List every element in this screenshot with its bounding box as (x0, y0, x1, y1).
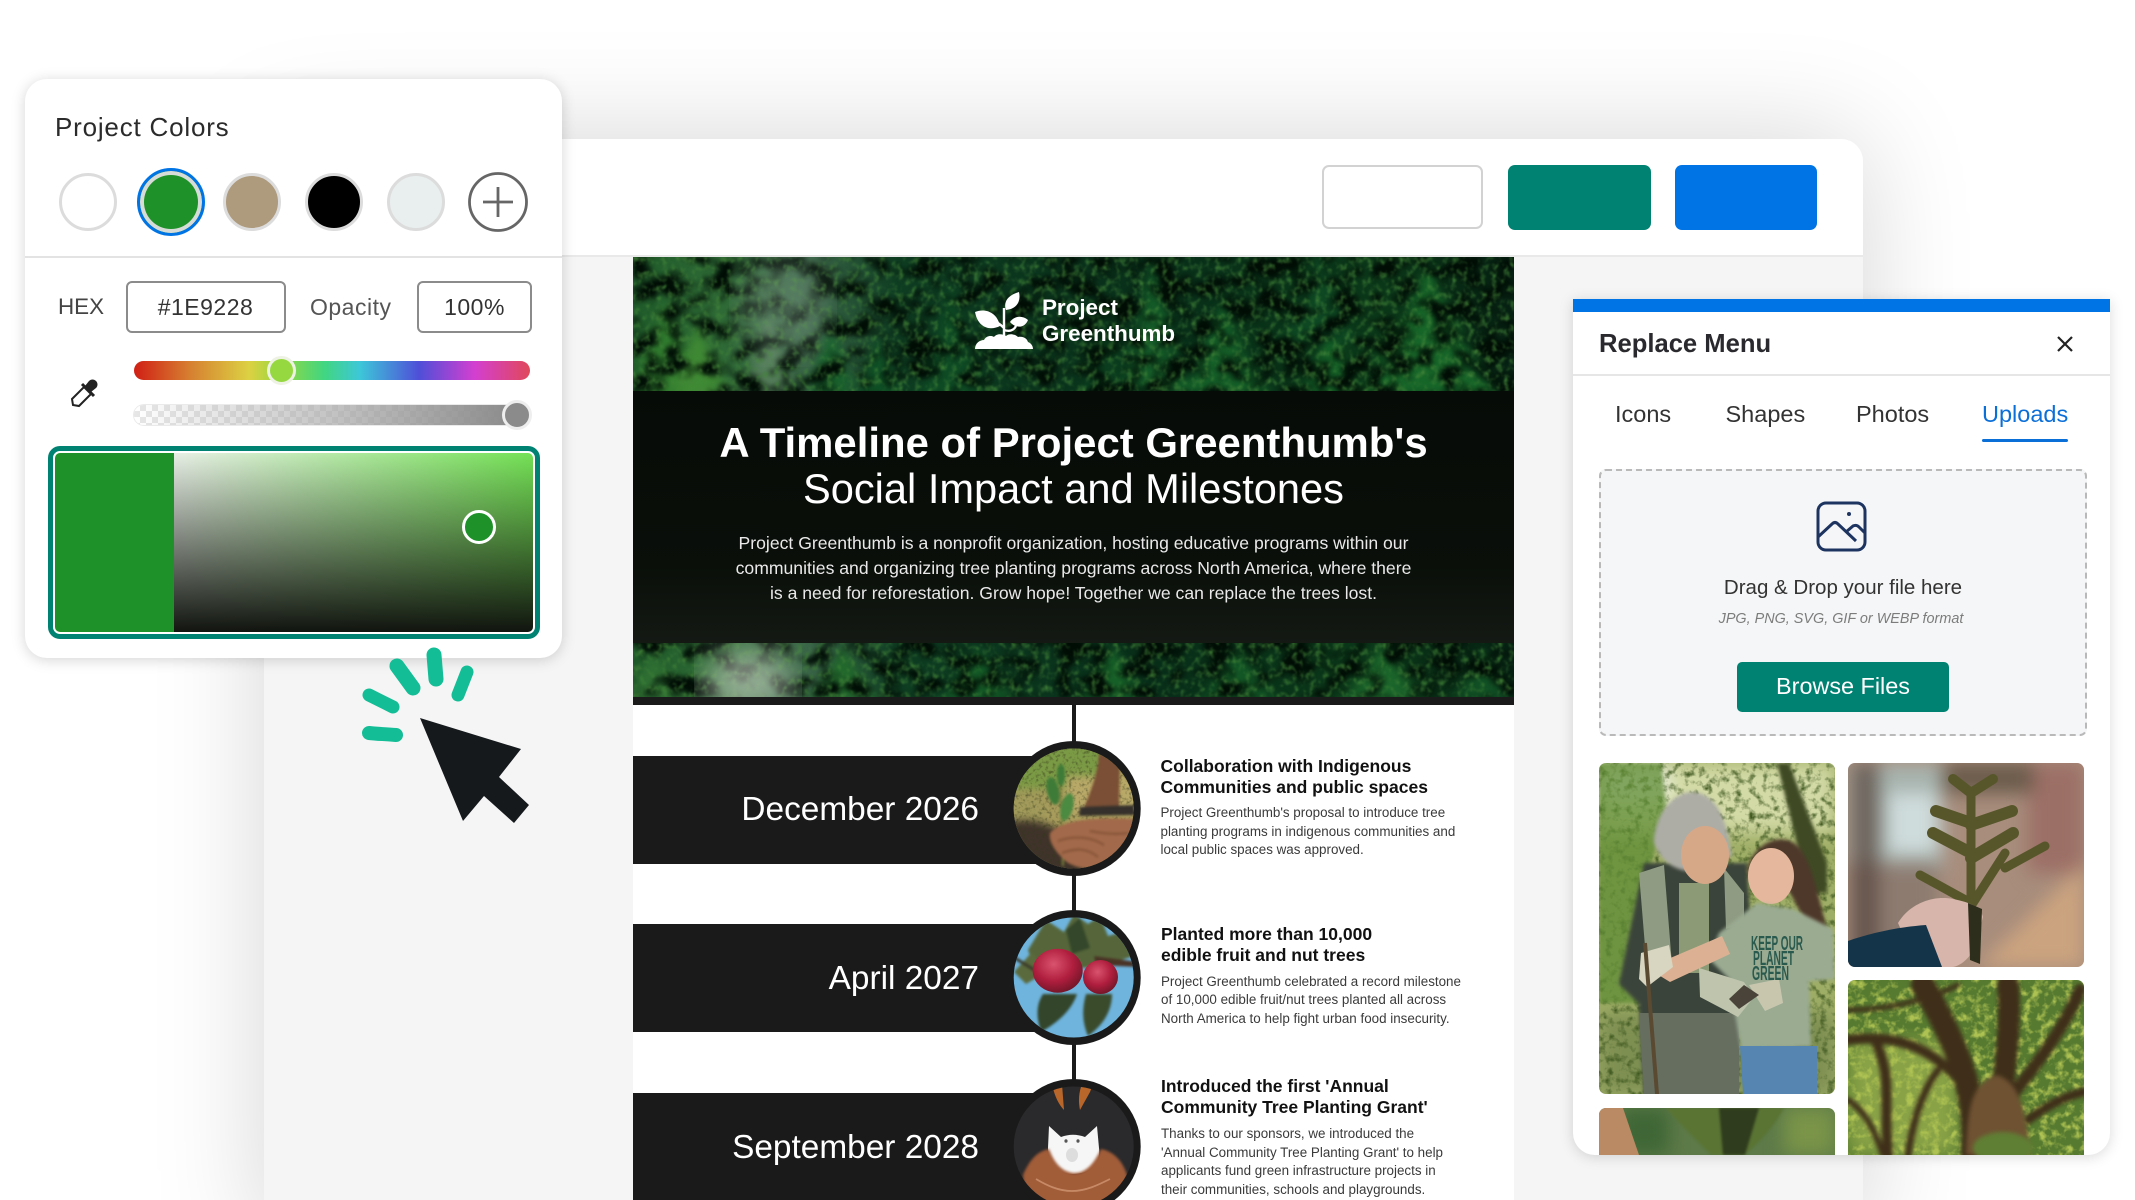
divider (25, 256, 562, 258)
milestone: April 2027 (633, 910, 1461, 1045)
tab underline (1982, 439, 2068, 442)
logo wordmark (1042, 294, 1175, 346)
click sparks (362, 648, 474, 742)
milestone heading: Introduced the first 'Annual (1161, 1076, 1389, 1096)
saturation gradient (174, 452, 532, 632)
milestone: December 2026 (633, 741, 1455, 876)
hue thumb (267, 356, 296, 385)
intro paragraph: is a need for reforestation. Grow hope! Together we can replace the trees lost. (770, 583, 1377, 603)
milestone description: of 10,000 edible fruit/nut trees planted all across (1161, 992, 1446, 1007)
milestone heading (1161, 1076, 1428, 1117)
swatch: tan (223, 173, 281, 231)
panel: replace menu (1573, 299, 2110, 1155)
date band (633, 1093, 1073, 1200)
timeline section background (633, 697, 1514, 1200)
timeline spine (1072, 705, 1076, 1145)
toolbar button: teal (1508, 165, 1651, 230)
photo: large tree canopy (1848, 980, 2084, 1155)
hex input (126, 281, 286, 333)
colour picker field (48, 446, 540, 638)
milestone text (1161, 1076, 1443, 1197)
milestone description (1161, 974, 1461, 1026)
photo: grandmother and girl planting (1599, 763, 1835, 1094)
tab: shapes: Shapes (1726, 401, 1805, 427)
photo: person with shrub (cropped) (1599, 1108, 1835, 1155)
opacity input: 100% (444, 294, 505, 320)
upload drop zone (1599, 469, 2087, 736)
photo: grandmother and girl planting: PLANET (1753, 948, 1794, 970)
heading: Social Impact and Milestones (803, 465, 1344, 512)
tab: photos: Photos (1856, 401, 1929, 427)
milestone description: planting programs in indigenous communities and (1160, 824, 1455, 839)
cursor arrow (420, 718, 529, 823)
hex input: #1E9228 (158, 294, 253, 320)
main editor card (264, 139, 1863, 1200)
opacity thumb (502, 400, 532, 430)
toolbar button: outline (1322, 165, 1483, 229)
swatch: black (305, 173, 363, 231)
panel title: Project Colors (55, 112, 229, 142)
hue slider (134, 361, 530, 380)
date band (633, 924, 1073, 1032)
heading: A Timeline of Project Greenthumb's (719, 419, 1428, 466)
heading (719, 419, 1428, 512)
milestone description: Project Greenthumb's proposal to introduce tree (1160, 805, 1445, 820)
milestone heading: edible fruit and nut trees (1161, 945, 1365, 965)
tab: icons: Icons (1615, 401, 1671, 427)
header rule (633, 697, 1514, 705)
tab: uploads active: Uploads (1982, 401, 2068, 427)
date label: September 2028 (732, 1129, 979, 1166)
swatch: white (59, 173, 117, 231)
add swatch button (468, 172, 528, 232)
photo: piggy bank in hands (1014, 1079, 1141, 1200)
photo: planting seedling (1014, 741, 1141, 876)
milestone description: 'Annual Community Tree Planting Grant' to help (1161, 1145, 1443, 1160)
drop instruction: Drag & Drop your file here (1724, 576, 1962, 599)
opacity slider (134, 405, 530, 425)
icon: eyedropper (70, 380, 98, 408)
picker thumb (462, 510, 496, 544)
milestone description (1161, 1126, 1443, 1197)
file format hint: JPG, PNG, SVG, GIF or WEBP format (1719, 611, 1963, 627)
intro paragraph: communities and organizing tree planting programs across North America, where there (736, 558, 1411, 578)
date label: December 2026 (741, 791, 979, 828)
milestone text (1160, 756, 1455, 857)
logo wordmark: Greenthumb (1042, 320, 1175, 346)
swatch: light grey (387, 173, 445, 231)
intro paragraph (736, 533, 1411, 603)
browse button: Browse Files (1776, 673, 1910, 699)
infographic header: forest photo (633, 257, 1514, 1146)
panel title: Replace Menu (1599, 330, 1771, 358)
milestone description: North America to help fight urban food insecurity. (1161, 1011, 1450, 1026)
milestone description: applicants fund green infrastructure projects in (1161, 1163, 1436, 1178)
divider (1573, 374, 2110, 376)
hex label: HEX (58, 294, 104, 319)
milestone heading: Planted more than 10,000 (1161, 924, 1372, 944)
milestone description (1160, 805, 1455, 857)
logo: Project Greenthumb (975, 292, 1175, 349)
milestone description: Project Greenthumb celebrated a record milestone (1161, 974, 1461, 988)
tab divider (1573, 441, 2110, 443)
swatch: selected green (137, 168, 205, 236)
milestone description: Thanks to our sponsors, we introduced the (1161, 1126, 1414, 1141)
milestone heading (1160, 756, 1428, 797)
toolbar button: blue (1675, 165, 1817, 230)
milestone heading: Community Tree Planting Grant' (1161, 1097, 1428, 1117)
date label: April 2027 (829, 960, 979, 996)
milestone heading: Collaboration with Indigenous (1160, 756, 1411, 776)
milestone: September 2028 (633, 1076, 1443, 1200)
dark title panel (633, 391, 1514, 643)
current colour block (54, 452, 174, 632)
photo: grandmother and girl planting: GREEN (1752, 963, 1789, 985)
icon: image (1816, 502, 1866, 552)
tabs (1615, 401, 2068, 442)
opacity input (417, 281, 532, 333)
browse button (1737, 662, 1949, 712)
logo wordmark: Project (1042, 294, 1118, 320)
date band (633, 756, 1073, 864)
milestone text (1161, 924, 1461, 1026)
photo: apples on branch (1014, 910, 1141, 1045)
panel: project colors (25, 79, 562, 658)
milestone heading: Communities and public spaces (1160, 777, 1428, 797)
intro paragraph: Project Greenthumb is a nonprofit organization, hosting educative programs within our (739, 533, 1408, 553)
opacity label: Opacity (310, 294, 391, 320)
panel accent bar (1573, 299, 2110, 312)
milestone heading (1161, 924, 1372, 965)
icon: sprout logo (975, 292, 1033, 349)
icon: close (2057, 336, 2073, 352)
milestone description: their communities, schools and playgrounds. (1161, 1182, 1425, 1197)
milestone description: local public spaces was approved. (1160, 842, 1364, 857)
photo: hand holding spruce sprig (1848, 763, 2084, 967)
top toolbar (264, 139, 1863, 257)
